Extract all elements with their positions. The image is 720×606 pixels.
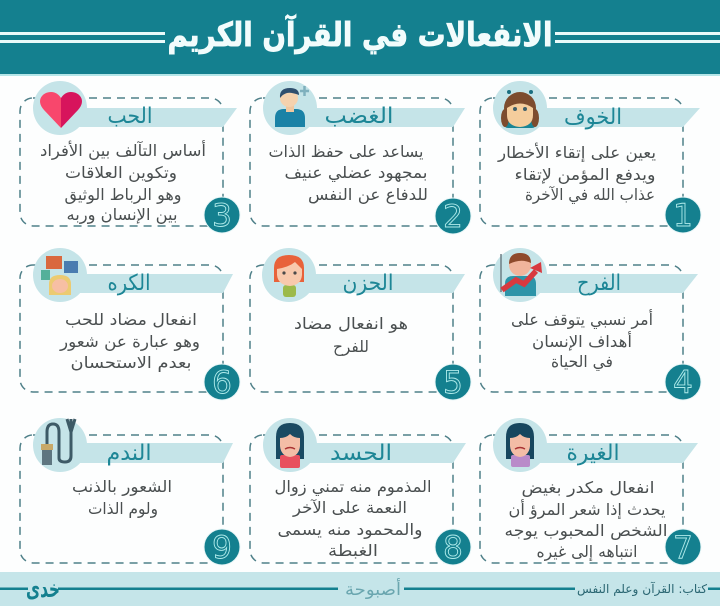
number 3: 3 <box>212 198 232 234</box>
text: envy description: المذموم منه تمني زوال <box>274 477 432 497</box>
text: love description: بين الإنسان وربه <box>66 205 178 225</box>
text: joy description: أهداف الإنسان <box>532 331 632 351</box>
panel: 7 jealousy <box>480 418 701 566</box>
panel: 9 regret <box>20 418 240 566</box>
number 5: 5 <box>443 365 463 401</box>
text: joy description: أمر نسبي يتوقف على <box>511 309 653 330</box>
text: jealousy description <box>504 478 668 562</box>
title: الانفعالات في القرآن الكريم <box>168 14 552 55</box>
panel: 1 fear <box>480 81 701 234</box>
text: sadness description: هو انفعال مضاد <box>294 314 408 334</box>
heading: jealousy: الغيرة <box>566 441 620 466</box>
panel: 2 anger <box>250 81 471 235</box>
heading: envy: الحسد <box>330 441 392 466</box>
icon: envious woman <box>276 423 304 468</box>
text: love description: وهو الرباط الوثيق <box>64 185 182 205</box>
header band <box>0 0 720 76</box>
text: sadness description <box>294 314 408 357</box>
text: hatred description: وهو عبارة عن شعور <box>59 332 200 352</box>
number 2 <box>435 198 471 235</box>
number 6: 6 <box>212 365 232 401</box>
footer logo: أصبوحة <box>345 578 401 600</box>
text: jealousy description: يحدث إذا شعر المرؤ أن <box>508 499 666 520</box>
text: anger description: للدفاع عن النفس <box>308 185 428 205</box>
number 4: 4 <box>673 365 693 401</box>
heading: hatred: الكره <box>108 271 150 296</box>
number 7: 7 <box>673 530 693 566</box>
text: jealousy description: انفعال مكدر بغيض <box>522 478 654 498</box>
text: anger description: بمجهود عضلي عنيف <box>284 163 428 183</box>
text: fear description: ويدفع المؤمن لإتقاء <box>514 165 656 185</box>
text: love description: أساس التآلف بين الأفراد <box>40 140 206 161</box>
text: hatred description: بعدم الاستحسان <box>70 353 192 372</box>
icon: frightened girl <box>501 90 539 128</box>
text: regret description: الشعور بالذنب <box>72 477 172 497</box>
icon: jealous woman <box>506 423 534 467</box>
number 1: 1 <box>673 198 693 234</box>
text: regret description <box>72 477 172 519</box>
panel: 4 joy <box>480 248 701 401</box>
text: love description <box>40 140 206 225</box>
number 4 <box>665 364 701 401</box>
icon: heart <box>40 92 82 128</box>
icon: woman with angry speech bubbles <box>41 256 78 295</box>
heading: sadness: الحزن <box>342 271 394 296</box>
heading: anger: الغضب <box>324 104 394 129</box>
panel: 8 envy <box>250 418 471 566</box>
number 9: 9 <box>212 530 232 566</box>
text: regret description: ولوم الذات <box>88 499 158 519</box>
text: fear description: عذاب الله في الآخرة <box>525 185 655 205</box>
number 3 <box>204 197 240 234</box>
text: love description: وتكوين العلاقات <box>65 163 177 183</box>
panel: 5 sadness <box>250 248 471 401</box>
icon: angry man <box>275 86 309 127</box>
text: sadness description: للفرح <box>333 337 369 357</box>
number 2: 2 <box>443 199 463 235</box>
text: envy description: النعمة على الآخر <box>292 498 407 518</box>
number 8 <box>435 529 471 566</box>
number 5 <box>435 364 471 401</box>
footer source text: كتاب: القرآن وعلم النفس <box>577 581 707 597</box>
panel: 3 love <box>20 81 240 234</box>
icon: cable plug <box>41 419 75 465</box>
footer signature: خدى <box>26 575 60 603</box>
number 6 <box>204 364 240 401</box>
heading: love: الحب <box>108 104 152 129</box>
number 7 <box>665 529 701 566</box>
panel: 6 hatred <box>20 248 240 401</box>
text: joy description <box>511 309 653 372</box>
text: jealousy description: انتباهه إلى غيره <box>536 542 638 562</box>
text: fear description: يعين على إتقاء الأخطار <box>497 142 656 163</box>
text: envy description <box>274 477 432 560</box>
text: envy description: الغبطة <box>328 541 378 560</box>
heading: fear: الخوف <box>564 105 622 130</box>
icon: sad red-haired girl <box>274 255 304 297</box>
heading: joy: الفرح <box>577 271 621 296</box>
number 1 <box>665 197 701 234</box>
text: hatred description <box>59 310 200 372</box>
text: hatred description: انفعال مضاد للحب <box>65 310 197 329</box>
text: jealousy description: الشخص المحبوب يوجه <box>504 521 668 541</box>
text: anger description: يساعد على حفظ الذات <box>268 142 424 161</box>
text: joy description: في الحياة <box>551 352 613 372</box>
number 8: 8 <box>443 530 463 566</box>
text: anger description <box>268 142 428 205</box>
footer band <box>0 572 720 606</box>
icon: man with rising arrow <box>501 253 542 296</box>
heading: regret: الندم <box>106 441 152 466</box>
text: envy description: والمحمود منه يسمى <box>278 520 422 540</box>
text: fear description <box>497 142 656 205</box>
number 9 <box>204 529 240 566</box>
